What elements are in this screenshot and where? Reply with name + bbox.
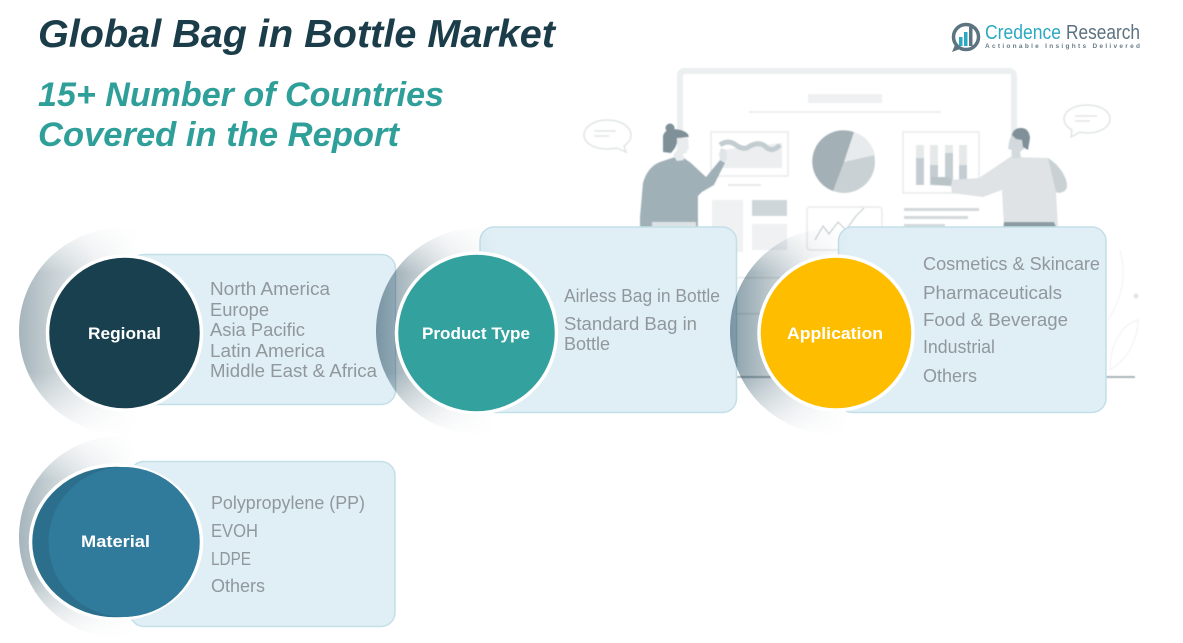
illustration: monitor frame (680, 71, 1014, 232)
crescent (375, 227, 583, 435)
list: regions: Europe (210, 300, 269, 320)
icon: left speech bubble (584, 120, 631, 152)
illustration: woman presenter (640, 124, 727, 230)
icon: logo mark (952, 24, 978, 52)
list: applications: Industrial (923, 337, 995, 357)
list: product types: Standard Bag in (564, 314, 697, 334)
list: product types: Bottle (564, 334, 610, 354)
subtitle: 15+ Number of Countries (38, 76, 444, 114)
illustration: pie chart (812, 130, 875, 193)
panel: Regional (18, 227, 396, 435)
list: materials: Others (211, 576, 265, 596)
panel: Application (729, 227, 1106, 435)
illustration: desk lines (735, 277, 1135, 378)
illustration: area chart card (711, 132, 788, 176)
list: applications: Cosmetics & Skincare (923, 254, 1100, 274)
list: materials: EVOH (211, 521, 258, 541)
illustration: lower screen blocks (712, 184, 787, 252)
circle: Regional (48, 256, 202, 410)
panel: Material (18, 435, 395, 639)
list: applications: Others (923, 366, 977, 386)
panel background (838, 227, 1106, 412)
illustration: man presenter (931, 128, 1067, 230)
list: product types (564, 286, 720, 354)
panel: Product Type (375, 227, 736, 435)
list: regions: Asia Pacific (210, 320, 305, 340)
logo: Credence Research (952, 22, 1140, 52)
icon: small dot (1134, 294, 1138, 298)
logo wordmark second word: Research (1066, 22, 1140, 44)
list: regions: Latin America (210, 341, 326, 361)
logo tagline: Actionable Insights Delivered (985, 43, 1140, 50)
list: applications: Food & Beverage (923, 310, 1068, 330)
illustration: screen heading bars (749, 94, 941, 113)
crescent (18, 227, 226, 435)
label: Regional (88, 324, 161, 343)
subtitle: Covered in the Report (38, 116, 401, 154)
logo wordmark: Credence (985, 22, 1061, 44)
list: applications (923, 254, 1100, 386)
list: materials: LDPE (211, 549, 251, 569)
crescent (18, 435, 222, 639)
crescent (729, 227, 937, 435)
illustration: line chart card (807, 207, 882, 250)
circle: Material (30, 465, 202, 619)
label: Product Type (422, 324, 530, 343)
circle: Product Type (396, 253, 556, 413)
panel background (480, 227, 736, 412)
subtitle (38, 76, 444, 154)
list: regions (210, 279, 378, 381)
illustration: text lines (904, 208, 979, 227)
illustration: bar chart card (903, 132, 979, 193)
icon: right speech bubble (1064, 105, 1110, 137)
panel background (130, 254, 396, 404)
list: product types: Airless Bag in Bottle (564, 286, 720, 306)
panel background (130, 462, 395, 626)
label: Application (787, 324, 883, 343)
list: materials (211, 493, 365, 596)
title: Global Bag in Bottle Market (38, 13, 557, 56)
circle: Application (759, 256, 913, 410)
list: regions: Middle East & Africa (210, 361, 378, 381)
list: materials: Polypropylene (PP) (211, 493, 365, 513)
list: applications: Pharmaceuticals (923, 283, 1062, 303)
illustration: faint leaves (1108, 250, 1138, 370)
list: regions: North America (210, 279, 331, 299)
illustration: presenters at dashboard screen (584, 71, 1138, 378)
label: Material (81, 532, 150, 551)
